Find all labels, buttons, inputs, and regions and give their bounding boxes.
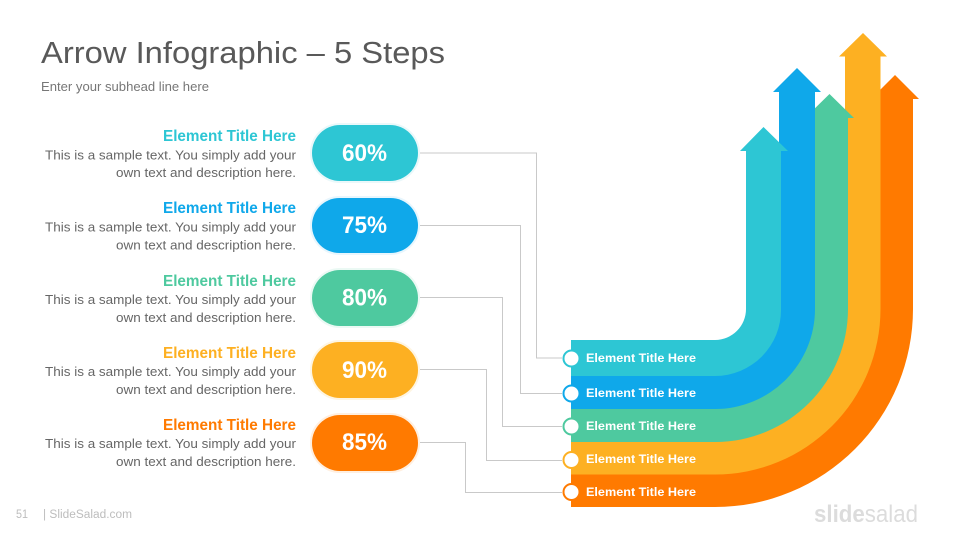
- row 2 text: [45, 200, 296, 252]
- band label teal: Element Title Here: [586, 351, 696, 365]
- arrow: orange: [571, 75, 919, 507]
- row 5 text: Element Title Here: [163, 417, 296, 434]
- row 3 text: Element Title Here: [163, 273, 296, 290]
- arrow: teal: [571, 127, 788, 376]
- arrow: blue: [571, 68, 821, 409]
- row 2 text: own text and description here.: [116, 238, 296, 252]
- row 4 pill: [312, 342, 418, 398]
- row 3 text: own text and description here.: [116, 311, 296, 325]
- row 4 text: own text and description here.: [116, 383, 296, 397]
- row 3 text: [45, 273, 296, 325]
- row 5 pill: 85%: [342, 429, 387, 456]
- row 3 pill: [312, 270, 418, 326]
- band label yellow: [564, 452, 696, 468]
- row 4 text: Element Title Here: [163, 345, 296, 362]
- curved arrows: [571, 33, 919, 507]
- footer source: | SlideSalad.com: [43, 509, 132, 521]
- row 2 text: Element Title Here: [163, 200, 296, 217]
- title: Arrow Infographic – 5 Steps: [41, 35, 445, 70]
- row 4 text: [45, 345, 296, 397]
- row 1 pill: [312, 125, 418, 181]
- footer page number: 51: [16, 509, 28, 521]
- row 2 pill: [312, 198, 418, 253]
- band label green: [564, 418, 696, 434]
- row 2 pill: 75%: [342, 212, 387, 239]
- row 1 pill: 60%: [342, 140, 387, 167]
- row 1 text: own text and description here.: [116, 166, 296, 180]
- row 5 text: own text and description here.: [116, 455, 296, 469]
- row 5 text: This is a sample text. You simply add your: [45, 437, 296, 451]
- band label blue: [564, 386, 696, 402]
- band label orange: [564, 484, 696, 500]
- logo: slidesalad: [814, 501, 918, 528]
- row 3 pill: 80%: [342, 284, 387, 312]
- band label yellow: Element Title Here: [586, 452, 696, 466]
- subhead: Enter your subhead line here: [41, 80, 209, 94]
- connector lines: [420, 153, 562, 492]
- band label orange: Element Title Here: [586, 485, 696, 499]
- arrow: yellow: [571, 33, 887, 474]
- band label blue: Element Title Here: [586, 386, 696, 400]
- band label green: Element Title Here: [586, 419, 696, 433]
- row 5 pill: [312, 415, 418, 471]
- row 3 text: This is a sample text. You simply add your: [45, 293, 296, 307]
- row 5 text: [45, 417, 296, 469]
- row 1 text: [45, 128, 296, 180]
- row 2 text: This is a sample text. You simply add your: [45, 220, 296, 234]
- row 4 pill: 90%: [342, 357, 387, 384]
- row 1 text: This is a sample text. You simply add your: [45, 148, 296, 162]
- row 1 text: Element Title Here: [163, 128, 296, 145]
- row 4 text: This is a sample text. You simply add your: [45, 365, 296, 379]
- band label teal: [564, 350, 696, 366]
- arrow: green: [571, 94, 854, 442]
